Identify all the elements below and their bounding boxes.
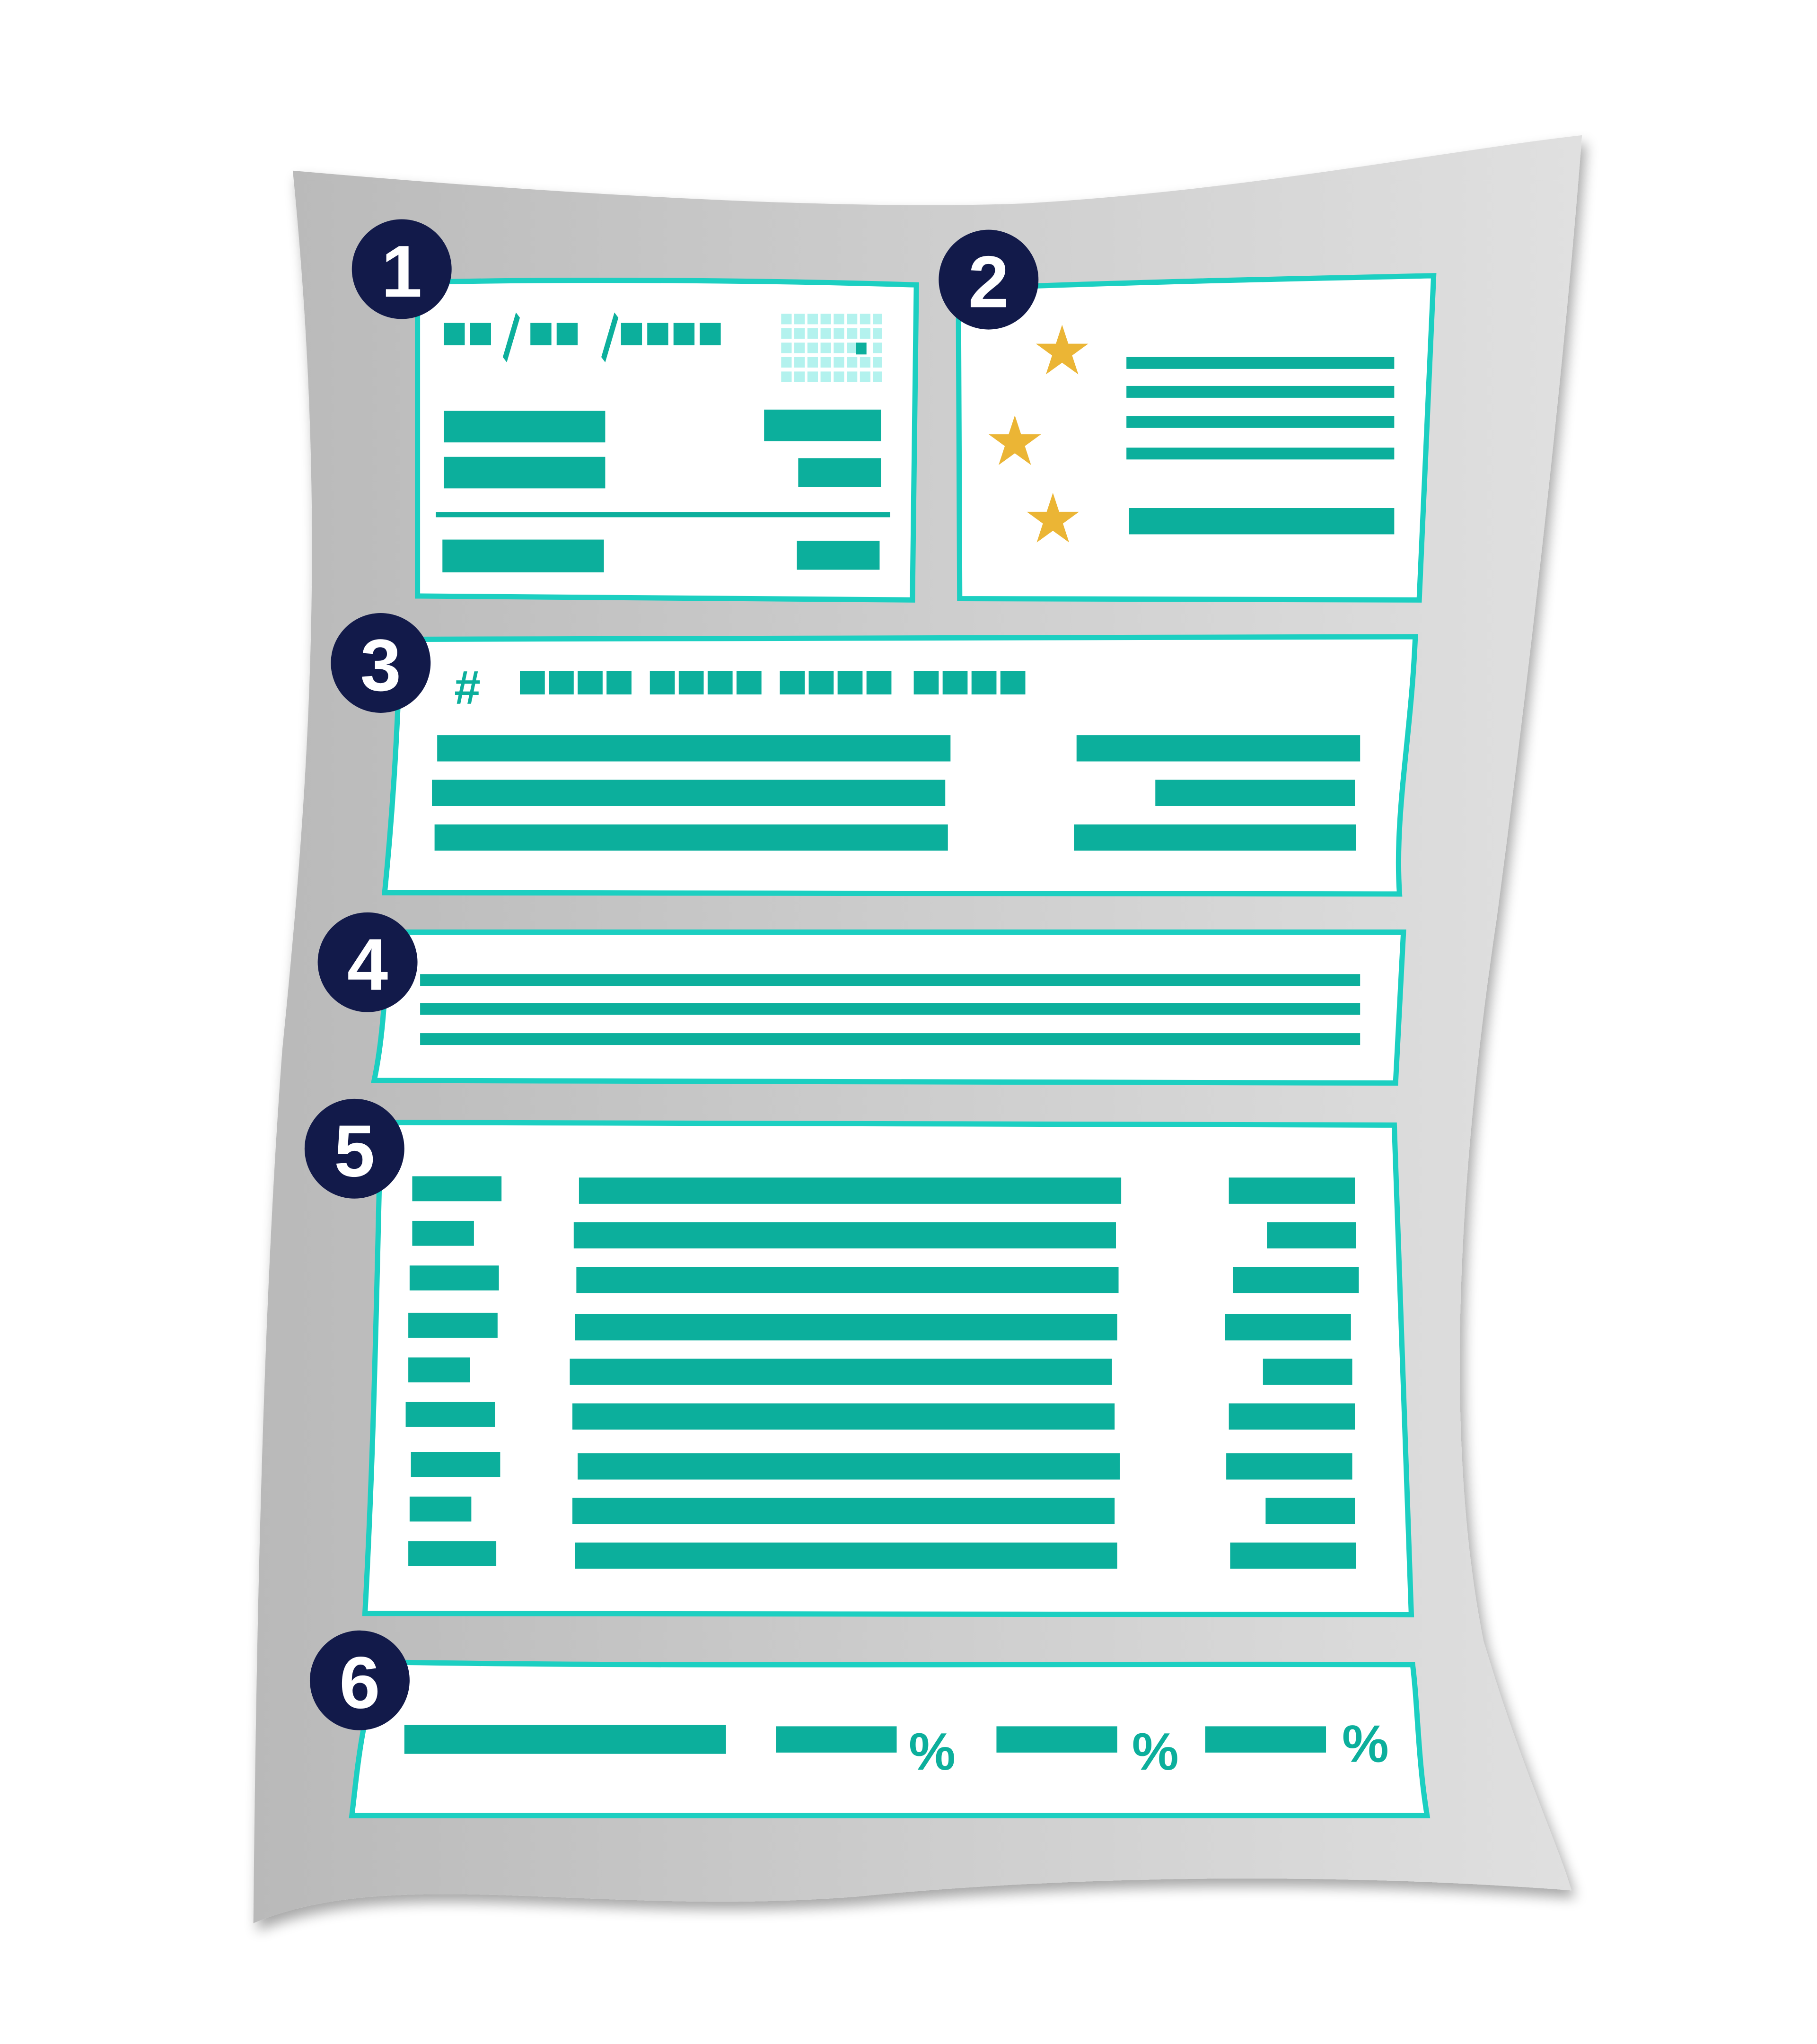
badge 1 xyxy=(352,219,452,319)
badge 2: 2 xyxy=(968,240,1009,323)
badge 5 xyxy=(305,1099,404,1199)
badge 6: 6 xyxy=(339,1641,380,1724)
panel 5: transactions table xyxy=(365,1123,1411,1615)
paper background xyxy=(254,135,1582,1923)
panel 3: account details: # xyxy=(454,662,481,714)
badge 5: 5 xyxy=(334,1110,375,1192)
panel 2: ratings xyxy=(958,276,1434,600)
icon: stars: ★ xyxy=(1022,479,1083,559)
icon: stars xyxy=(984,311,1093,559)
icon: stars: ★ xyxy=(984,402,1045,481)
panel 4: message lines xyxy=(374,932,1404,1083)
icon: calendar grid xyxy=(781,314,882,382)
icon: stars: ★ xyxy=(1032,311,1093,391)
panel 6: percentages: % xyxy=(909,1722,956,1781)
badge 3 xyxy=(331,613,430,713)
badge 1: 1 xyxy=(381,230,422,312)
panel 6: percentages xyxy=(352,1662,1427,1816)
panel 3: account details xyxy=(385,637,1415,894)
badge 6 xyxy=(310,1631,410,1730)
badge 3: 3 xyxy=(360,624,401,706)
badge 2 xyxy=(939,230,1038,330)
panel 1: date and totals xyxy=(418,281,916,600)
panel 6: percentages: % xyxy=(1132,1722,1179,1781)
badge 4: 4 xyxy=(347,923,388,1006)
panel 6: percentages: % xyxy=(1342,1714,1389,1773)
badge 4 xyxy=(318,912,418,1012)
